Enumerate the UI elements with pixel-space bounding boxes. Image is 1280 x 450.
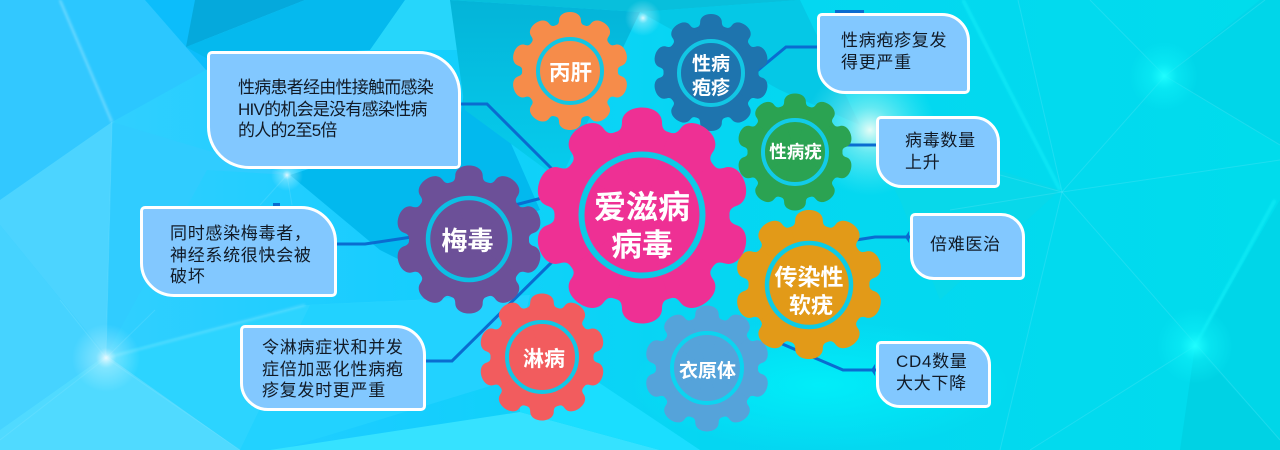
gear: 淋病	[477, 294, 607, 420]
gear: 性病疱疹: 性病	[692, 52, 730, 75]
callout: chancroid: 倍难医治	[930, 235, 1001, 254]
callout: gonorrhea: 症倍加恶化性病疱	[262, 360, 404, 378]
callout: chlamydia: CD4数量	[896, 352, 968, 371]
callout: gonorrhea: 令淋病症状和并发	[262, 338, 404, 357]
callout: warts: 上升	[905, 152, 940, 172]
callout: syphilis	[140, 206, 337, 297]
callout: warts: 病毒数量	[905, 131, 976, 150]
callout: HIV risk: 性病患者经由性接触而感染	[238, 78, 433, 97]
gear: 淋病: 淋病	[523, 348, 565, 371]
callout: HIV risk: 的人的2至5倍	[238, 121, 337, 140]
callout: syphilis: 神经系统很快会被	[170, 246, 312, 264]
callout: HIV risk: HIV的机会是没有感染性病	[238, 100, 427, 118]
callout: herpes	[817, 13, 970, 94]
callout: HIV risk	[207, 51, 461, 169]
callout: chlamydia	[876, 341, 991, 408]
gear: 丙肝	[509, 12, 631, 130]
gear: 传染性软疣: 传染性	[774, 264, 844, 290]
gear: 传染性软疣	[732, 210, 886, 359]
gear: 衣原体	[642, 306, 772, 432]
callout: syphilis: 同时感染梅毒者，	[170, 219, 312, 244]
callout: syphilis: 破坏	[170, 267, 205, 286]
gear: 性病疱疹	[651, 14, 771, 131]
gear: 性病疱疹: 疱疹	[692, 76, 730, 99]
callout: gonorrhea	[240, 325, 426, 411]
gear: 性病疣: 性病疣	[769, 142, 822, 162]
callout: chancroid	[910, 213, 1025, 280]
gear: 性病疣	[735, 94, 855, 210]
gear: 梅毒: 梅毒	[441, 226, 494, 256]
callout: chlamydia: 大大下降	[896, 374, 967, 392]
callout: herpes: 得更严重	[841, 52, 912, 72]
gear: 传染性软疣: 软疣	[789, 293, 833, 318]
gear: 衣原体: 衣原体	[679, 359, 736, 382]
gear: 丙肝: 丙肝	[549, 61, 592, 85]
gear: 爱滋病病毒 center	[531, 107, 753, 323]
callout: gonorrhea: 疹复发时更严重	[262, 381, 386, 400]
gear: 爱滋病病毒 center: 爱滋病	[594, 189, 690, 225]
gear: 梅毒	[393, 166, 545, 314]
callout: herpes: 性病疱疹复发	[841, 31, 947, 50]
callout: warts	[876, 116, 1000, 188]
gear: 爱滋病病毒 center: 病毒	[611, 228, 673, 263]
